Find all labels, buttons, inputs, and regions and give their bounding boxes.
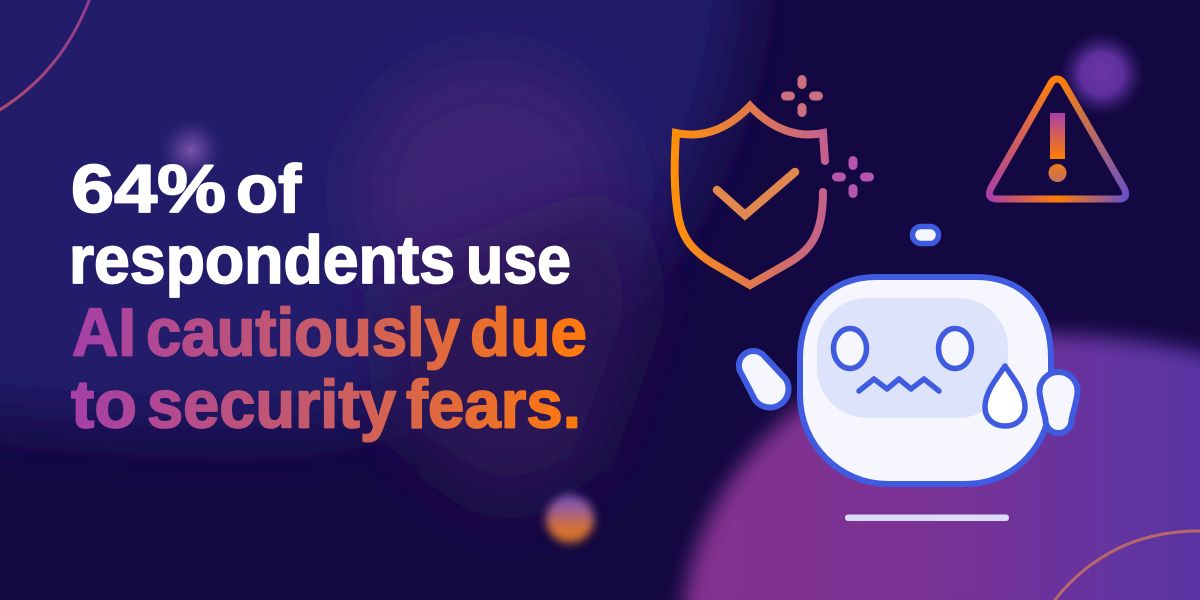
- headline line 4: fears.: [406, 366, 581, 442]
- exclamation mark: [1049, 113, 1067, 182]
- triangle base: [997, 196, 1119, 202]
- headline line 3: due: [470, 294, 587, 370]
- headline line 3: cautiously: [146, 294, 460, 370]
- robot face panel: [817, 298, 1008, 418]
- robot left hand: [739, 351, 789, 408]
- glow: top right: [1060, 32, 1144, 116]
- headline line 2: respondents: [69, 222, 455, 298]
- robot antenna: [912, 226, 938, 244]
- headline line 2: use: [466, 222, 571, 298]
- glow: top left: [159, 118, 223, 182]
- triangle right side: [1057, 79, 1126, 199]
- headline line 3: [72, 294, 587, 370]
- robot head: [800, 277, 1051, 484]
- robot left eye: [834, 328, 866, 368]
- arc: bottom right corner: [1054, 531, 1200, 600]
- robot shadow line: [845, 514, 1009, 521]
- triangle left side: [989, 79, 1057, 199]
- arc: top left corner: [0, 0, 90, 111]
- icon: shield with check: [675, 106, 825, 285]
- robot: [739, 226, 1078, 521]
- shield outline: [675, 106, 825, 285]
- icon: sparkle lower: [836, 160, 870, 194]
- headline line 1: 64%: [71, 151, 226, 227]
- headline: [69, 151, 587, 442]
- robot right eye: [938, 328, 972, 368]
- robot right hand: [1040, 372, 1078, 433]
- headline line 1: of: [236, 151, 301, 227]
- headline line 1: [71, 151, 301, 227]
- robot sweat drop: [985, 366, 1025, 426]
- headline line 4: security: [147, 366, 396, 442]
- robot mouth: [859, 379, 939, 391]
- headline line 4: to: [71, 366, 137, 442]
- icon: warning triangle: [989, 79, 1126, 199]
- headline line 3: AI: [72, 294, 136, 370]
- icon: sparkle upper: [786, 80, 818, 112]
- check mark: [717, 172, 795, 215]
- glow: orange orb: [546, 495, 594, 543]
- headline line 4: [71, 366, 581, 442]
